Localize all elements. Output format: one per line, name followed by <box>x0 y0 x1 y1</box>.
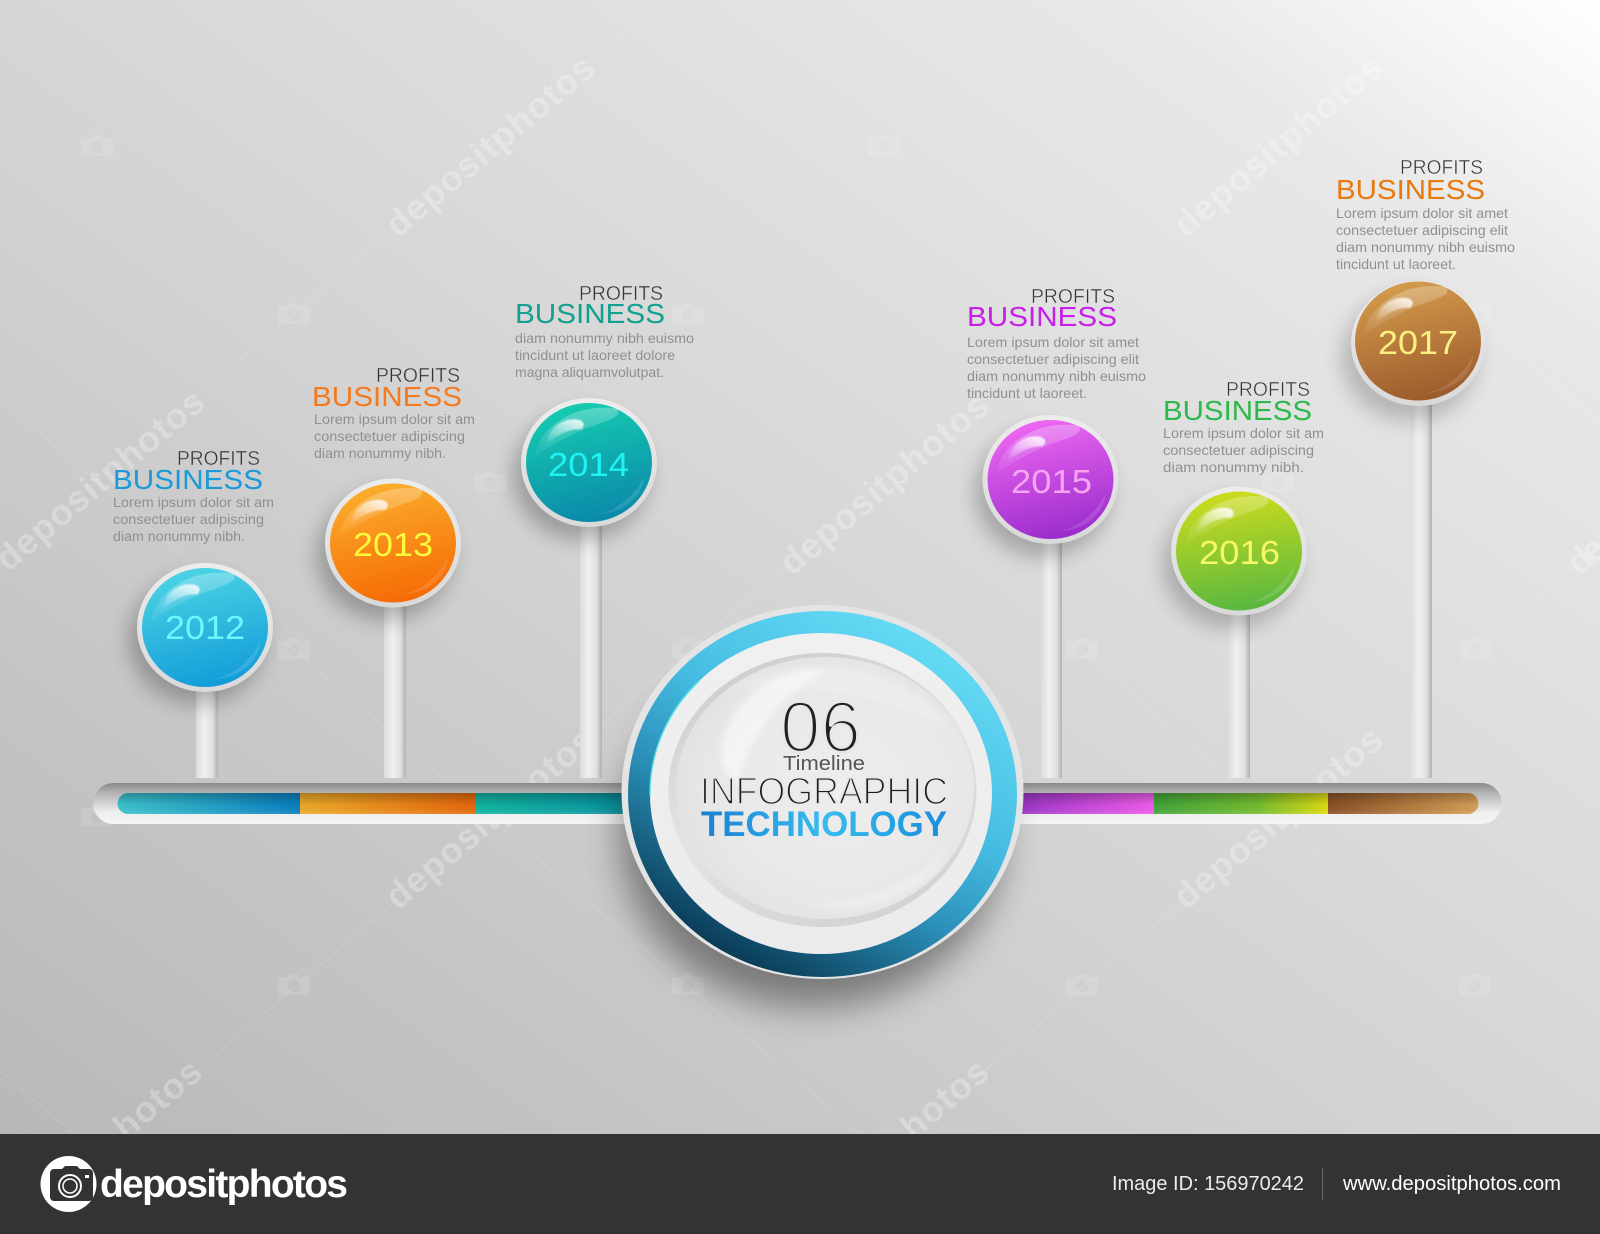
text block 2016: BUSINESS <box>1163 395 1312 426</box>
year label: 2014 <box>548 446 629 483</box>
text block 2012: consectetuer adipiscing <box>113 511 264 527</box>
stems <box>196 393 1432 778</box>
segment 2017 <box>1328 793 1478 814</box>
year label: 2012 <box>165 609 245 646</box>
text block 2017 <box>1336 157 1515 272</box>
text block 2013 <box>312 365 475 461</box>
text block 2015 <box>967 286 1146 401</box>
white disc <box>650 633 992 954</box>
INFOGRAPHIC: INFOGRAPHIC <box>700 771 948 813</box>
text block 2016: consectetuer adipiscing <box>1163 442 1314 458</box>
text block 2017: tincidunt ut laoreet. <box>1336 256 1456 272</box>
logo icon: camera <box>40 1156 96 1212</box>
segment 2013 <box>300 793 475 814</box>
central hub <box>620 605 1024 1007</box>
text block 2017: PROFITS <box>1400 157 1483 179</box>
watermark: depositphotos pattern: depositphotos <box>1165 46 1390 245</box>
text block 2015: Lorem ipsum dolor sit amet <box>967 334 1139 350</box>
watermark: depositphotos pattern: depositphotos <box>377 46 602 245</box>
segment 2014 <box>475 793 635 814</box>
text block 2012: diam nonummy nibh. <box>113 528 245 544</box>
text block 2014: BUSINESS <box>515 298 665 329</box>
watermark: depositphotos pattern: hotos <box>892 1050 996 1147</box>
text block 2015: tincidunt ut laoreet. <box>967 385 1087 401</box>
text block 2015: diam nonummy nibh euismo <box>967 368 1146 384</box>
text block 2012: PROFITS <box>177 448 260 470</box>
Timeline: Timeline <box>783 753 865 775</box>
milestone 2014 <box>513 398 657 540</box>
milestone 2015 <box>975 415 1118 557</box>
TECHNOLOGY: TECHNOLOGY <box>701 805 947 844</box>
timeline track <box>93 783 1502 824</box>
segment 2012 <box>118 793 300 814</box>
website: www.depositphotos.com <box>1342 1172 1561 1195</box>
text block 2012 <box>113 448 274 544</box>
image id: Image ID: 156970242 <box>1112 1172 1304 1195</box>
milestone 2012 <box>129 563 273 704</box>
logo wordmark: depositphotos <box>100 1163 348 1206</box>
bar shading <box>118 793 1478 814</box>
text block 2013: BUSINESS <box>312 381 462 412</box>
text block 2017: BUSINESS <box>1336 174 1485 205</box>
text block 2013: Lorem ipsum dolor sit am <box>314 411 475 427</box>
watermark: depositphotos pattern: hotos <box>105 1050 209 1147</box>
watermark: depositphotos pattern: depositphotos <box>377 718 602 917</box>
milestone 2017 <box>1342 281 1485 421</box>
text block 2013: consectetuer adipiscing <box>314 428 465 444</box>
text block 2012: BUSINESS <box>113 464 263 495</box>
blue ring <box>628 611 1017 977</box>
lens rim <box>668 653 976 927</box>
lens surface <box>676 657 974 919</box>
year label: 2016 <box>1199 534 1280 571</box>
text block 2013: PROFITS <box>376 365 460 387</box>
text block 2016: Lorem ipsum dolor sit am <box>1163 425 1324 441</box>
text block 2014: magna aliquamvolutpat. <box>515 364 664 380</box>
text block 2014: diam nonummy nibh euismo <box>515 330 694 346</box>
watermark: depositphotos pattern: depositphotos <box>771 384 996 583</box>
text block 2015: PROFITS <box>1031 286 1115 308</box>
text block 2014: PROFITS <box>579 283 663 305</box>
text block 2017: Lorem ipsum dolor sit amet <box>1336 205 1508 221</box>
text block 2014 <box>515 283 694 380</box>
milestone 2013 <box>317 478 461 620</box>
watermark: depositphotos pattern: depositphotos <box>1165 718 1390 917</box>
text block 2013: diam nonummy nibh. <box>314 445 446 461</box>
year label: 2013 <box>353 526 433 563</box>
watermark: camera icons <box>81 135 1491 995</box>
text block 2016: PROFITS <box>1226 379 1310 401</box>
segment 2016 <box>1154 793 1328 814</box>
text block 2016: diam nonummy nibh. <box>1163 459 1304 475</box>
milestone 2016 <box>1163 486 1307 628</box>
segment 2015 <box>1010 793 1154 814</box>
footer bar <box>0 1134 1600 1234</box>
text block 2014: tincidunt ut laoreet dolore <box>515 347 675 363</box>
text block 2017: diam nonummy nibh euismo <box>1336 239 1515 255</box>
text block 2015: consectetuer adipiscing elit <box>967 351 1139 367</box>
outer halo <box>622 605 1024 979</box>
year label: 2017 <box>1378 324 1458 361</box>
text block 2016 <box>1163 379 1324 475</box>
text block 2017: consectetuer adipiscing elit <box>1336 222 1508 238</box>
number 06: 06 <box>780 688 861 768</box>
text block 2012: Lorem ipsum dolor sit am <box>113 494 274 510</box>
year label: 2015 <box>1011 463 1092 500</box>
text block 2015: BUSINESS <box>967 301 1117 332</box>
